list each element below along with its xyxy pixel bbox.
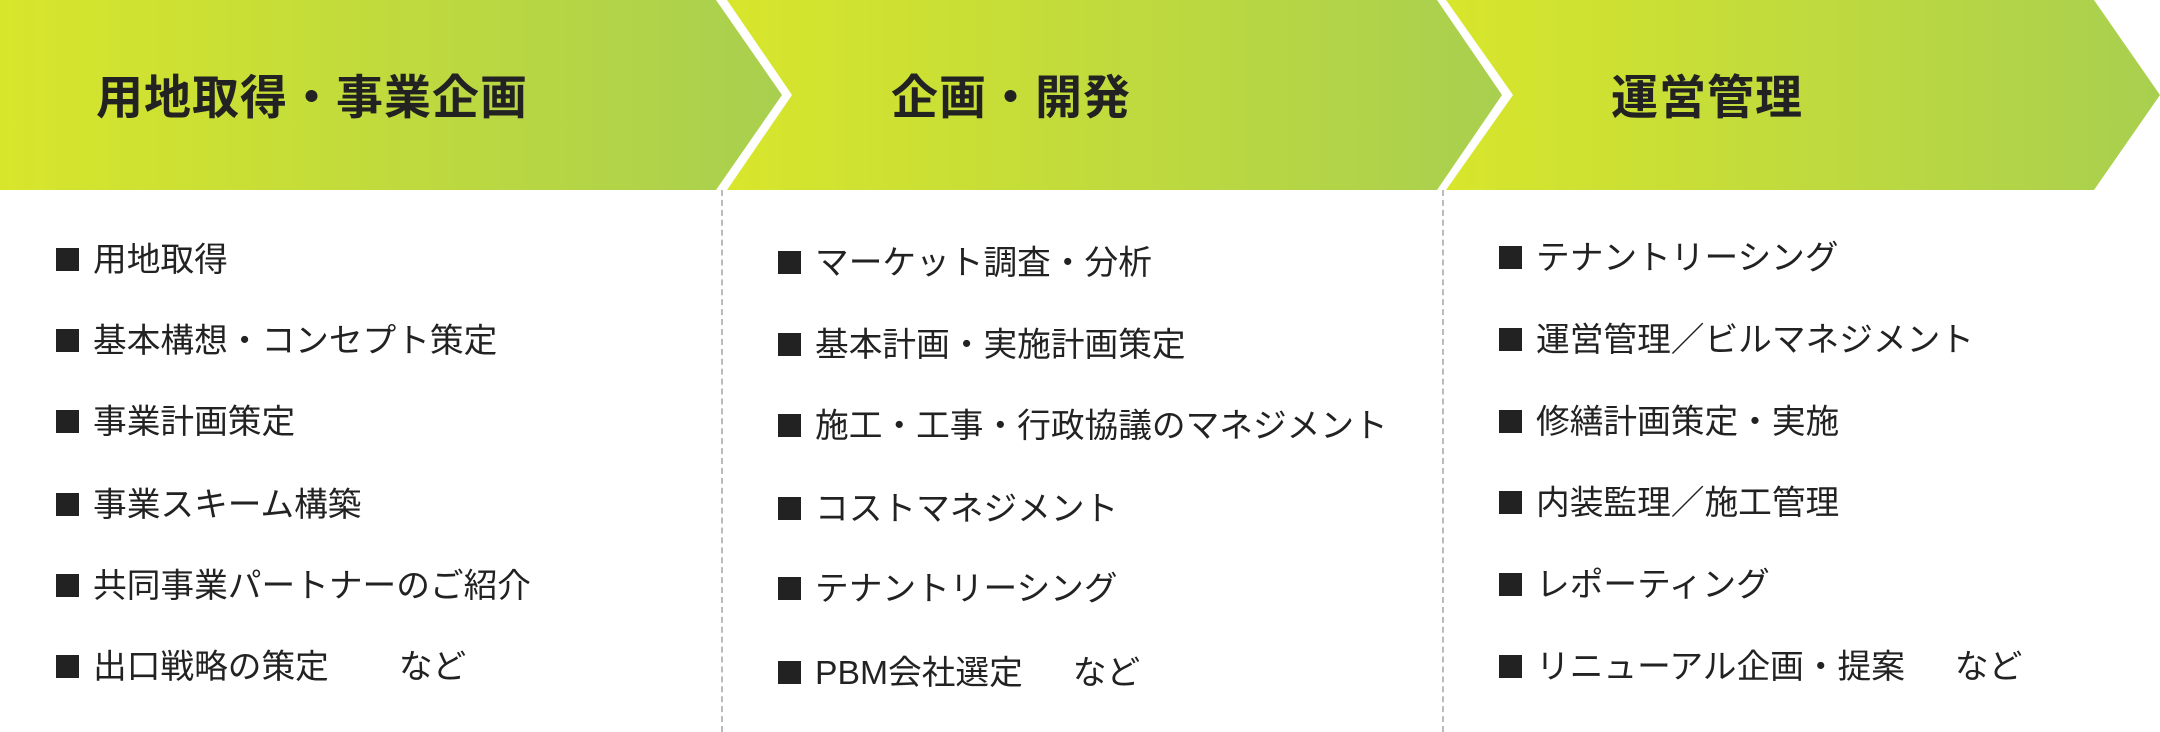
column 3 list (1499, 239, 2022, 686)
column 2 list: コストマネジメント (815, 490, 1118, 528)
title 3: 運営管理 (1611, 71, 1803, 124)
arrow 2 (727, 0, 1502, 190)
column 1 list: 事業スキーム構築 (93, 486, 362, 524)
title 2: 企画・開発 (891, 71, 1131, 124)
column 1 list: 用地取得 (93, 241, 228, 279)
column 1 list: 共同事業パートナーのご紹介 (93, 567, 531, 605)
column 2 list: PBM会社選定 など (815, 654, 1140, 692)
arrow 3 (1446, 0, 2160, 190)
column 2 list: 基本計画・実施計画策定 (815, 326, 1186, 364)
title 1: 用地取得・事業企画 (96, 71, 528, 124)
column 1 list: 出口戦略の策定 など (93, 648, 466, 686)
column 3 list: 内装監理／施工管理 (1536, 484, 1839, 522)
column 2 list: 施工・工事・行政協議のマネジメント (815, 407, 1388, 445)
column 3 list: リニューアル企画・提案 など (1536, 648, 2022, 686)
arrow 1 (0, 0, 782, 190)
column 3 list: 運営管理／ビルマネジメント (1536, 321, 1974, 359)
header arrows (0, 0, 2160, 190)
column 3 list: テナントリーシング (1536, 239, 1839, 277)
column 3 list: 修繕計画策定・実施 (1536, 403, 1839, 441)
column 2 list (778, 244, 1388, 692)
column 2 list: テナントリーシング (815, 570, 1118, 608)
column 1 list: 事業計画策定 (93, 403, 295, 441)
column 1 list: 基本構想・コンセプト策定 (93, 322, 497, 360)
column 1 list (56, 241, 531, 686)
column 3 list: レポーティング (1536, 566, 1770, 604)
column 2 list: マーケット調査・分析 (815, 244, 1152, 282)
